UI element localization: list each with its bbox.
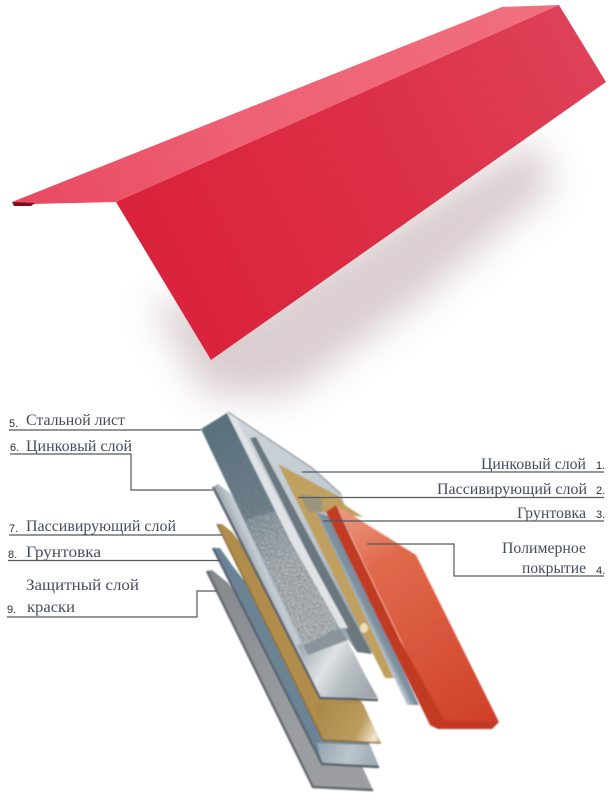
label 1 zinc layer: 1.: [596, 460, 605, 472]
layer 4 polymer coating: [326, 505, 499, 729]
label 3 primer: Грунтовка: [517, 505, 586, 522]
label 7 passivating layer: [9, 518, 222, 535]
label 8 primer: 8.: [8, 549, 17, 561]
label 9 protective paint layer: краски: [27, 599, 75, 616]
layer 7 passivating: [217, 524, 381, 743]
layer 3 primer: [316, 512, 419, 705]
soft shadow: [150, 140, 555, 395]
label 9 protective paint layer: 9.: [7, 604, 16, 616]
layer 8 primer: [213, 548, 379, 767]
label 9 protective paint layer: [7, 577, 217, 617]
front face: [116, 5, 606, 360]
layer 1 zinc: [227, 412, 372, 654]
label 2 passivating layer: Пассивирующий слой: [437, 481, 587, 498]
right labels: [298, 456, 605, 577]
label 1 zinc layer: Цинковый слой: [481, 456, 586, 473]
label 5 steel sheet: [9, 412, 201, 430]
label 9 protective paint layer: Защитный слой: [26, 577, 139, 594]
label 2 passivating layer: [298, 481, 605, 498]
label 1 zinc layer: [302, 456, 605, 473]
upper face: [12, 5, 559, 204]
label 5 steel sheet: Стальной лист: [26, 412, 125, 429]
label 8 primer: [8, 544, 220, 561]
label 7 passivating layer: 7.: [9, 523, 18, 535]
layer 2 passivating: [278, 464, 394, 678]
label 3 primer: [323, 505, 605, 522]
layer 9 protective paint: [207, 570, 373, 790]
label 2 passivating layer: 2.: [596, 485, 605, 497]
layer stack illustration: [201, 412, 499, 790]
layer 6 zinc: [213, 484, 378, 700]
ridge piece photo: [12, 5, 606, 395]
label 4 polymer coating: Полимерное: [502, 540, 586, 557]
layer 5 steel sheet: [201, 413, 348, 645]
folded edge: [12, 202, 35, 206]
label 4 polymer coating: 4.: [596, 565, 605, 577]
label 8 primer: Грунтовка: [26, 544, 101, 561]
label 4 polymer coating: покрытие: [522, 560, 586, 577]
label 6 zinc layer: 6.: [10, 442, 19, 454]
label 6 zinc layer: Цинковый слой: [26, 438, 132, 455]
left labels: [7, 412, 222, 617]
label 4 polymer coating: [367, 540, 605, 577]
label 3 primer: 3.: [596, 509, 605, 521]
label 5 steel sheet: 5.: [9, 418, 18, 430]
label 6 zinc layer: [10, 438, 213, 490]
label 7 passivating layer: Пассивирующий слой: [26, 518, 176, 535]
